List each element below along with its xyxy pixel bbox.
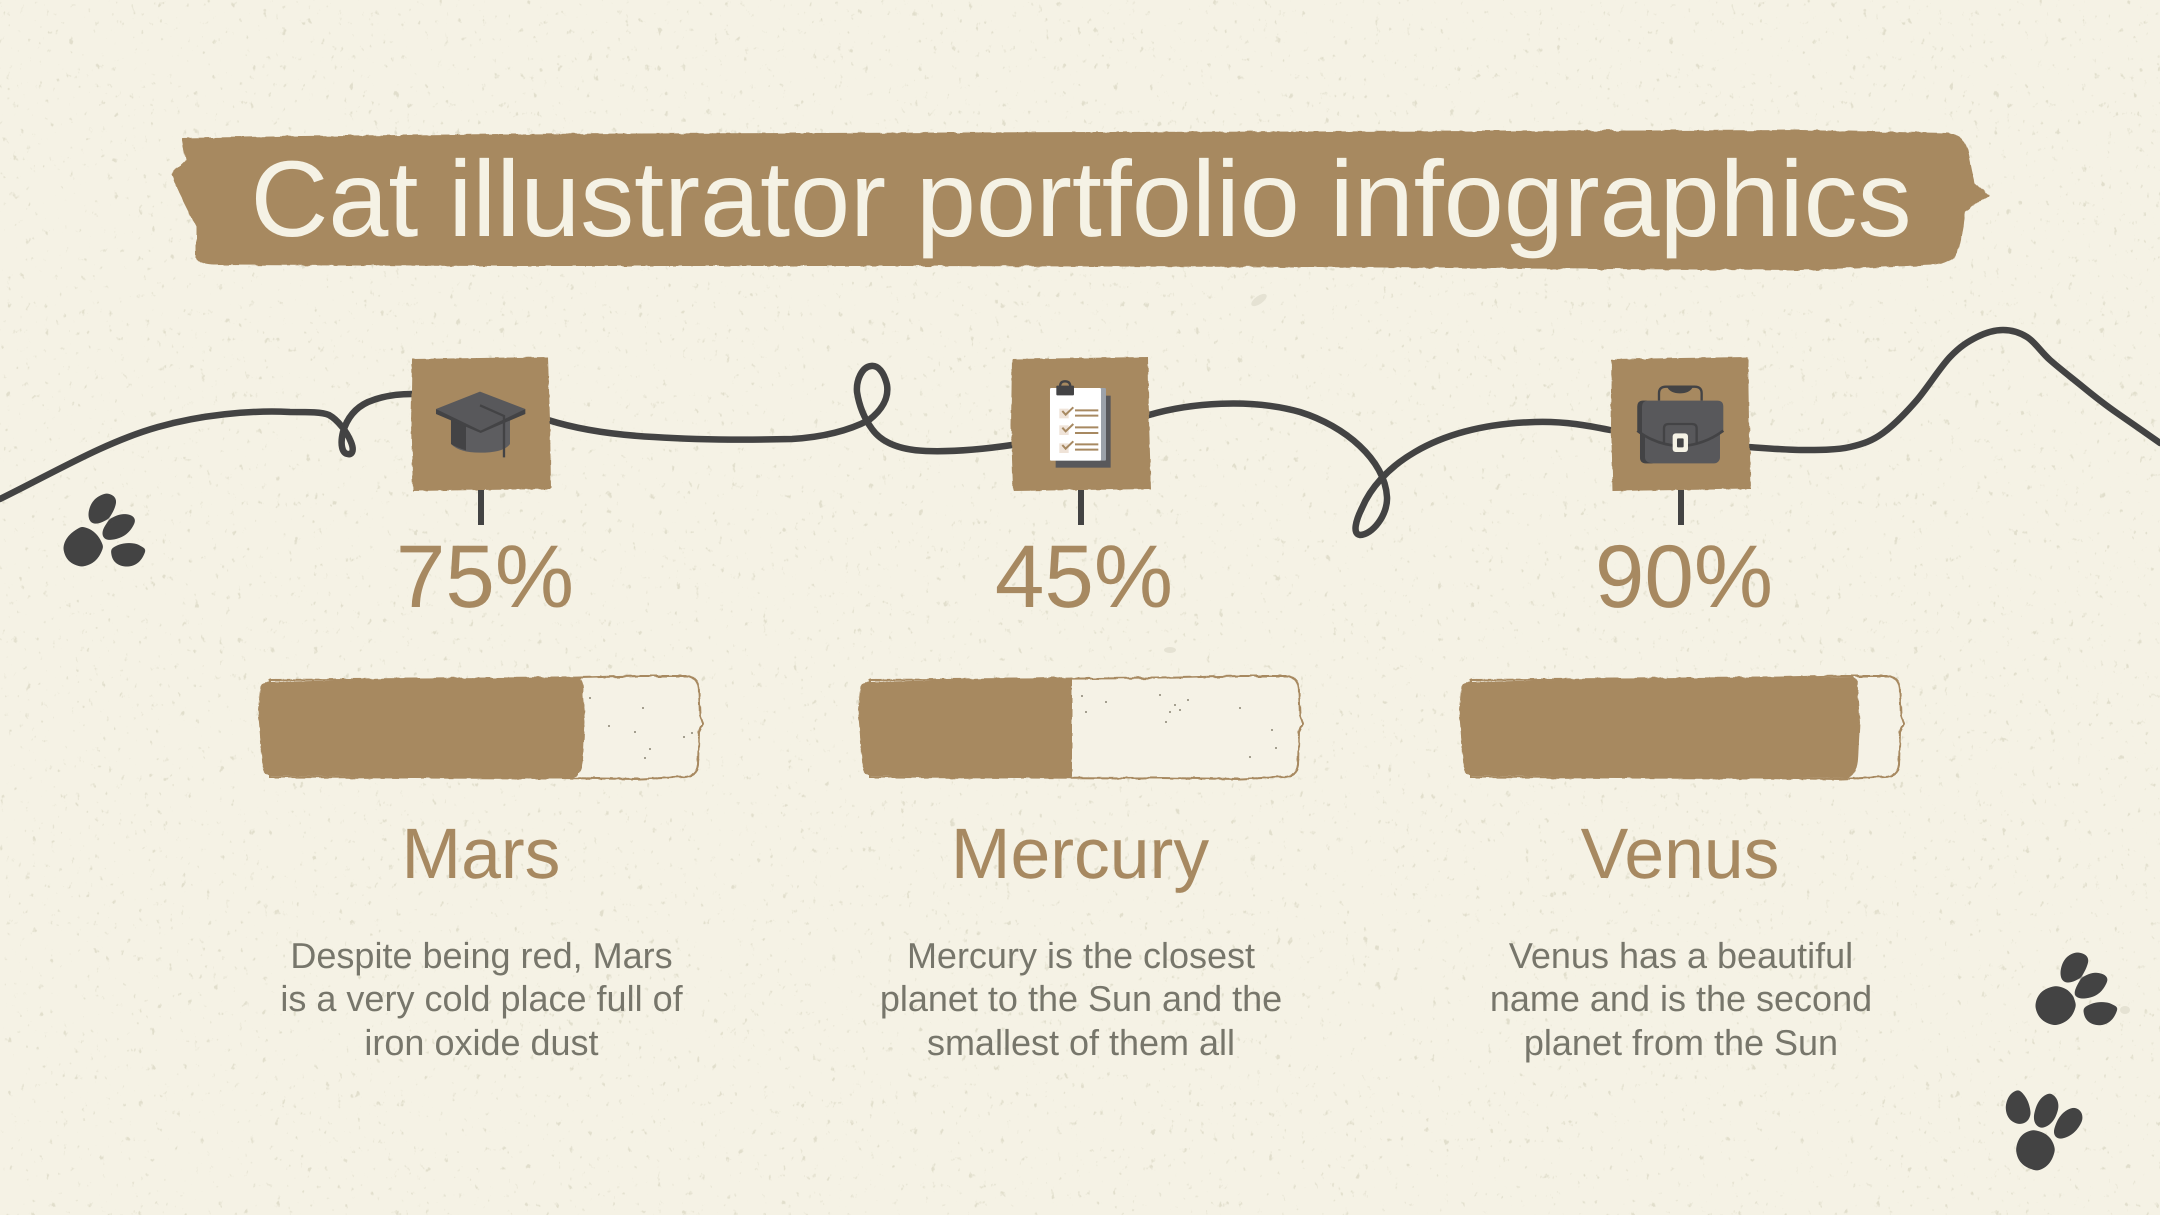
description: Mars: is a very cold place full of xyxy=(280,978,684,1019)
label: Mercury: Mercury xyxy=(951,814,1209,894)
icon: briefcase xyxy=(1637,387,1723,463)
icon: graduation cap xyxy=(436,392,525,457)
description: Mercury: smallest of them all xyxy=(927,1022,1235,1063)
description: Mercury: Mercury is the closest xyxy=(907,935,1255,976)
connector stem: Mars xyxy=(478,490,484,525)
title text: Cat illustrator portfolio infographics xyxy=(250,138,1912,259)
connector stem: Venus xyxy=(1678,490,1684,525)
progress bar: Venus 90% xyxy=(1459,676,1904,779)
description: Venus xyxy=(1490,935,1872,1063)
title banner xyxy=(172,130,1989,270)
icon panel: graduation cap xyxy=(411,357,551,491)
icon: paw print right upper xyxy=(2036,954,2116,1024)
description: Venus: name and is the second xyxy=(1490,978,1872,1019)
icon: paw print left xyxy=(64,495,144,566)
progress bar: Mars 75% xyxy=(258,676,703,779)
label: Mars: Mars xyxy=(402,814,560,894)
description: Mars: iron oxide dust xyxy=(364,1022,599,1063)
description: Mars: Despite being red, Mars xyxy=(290,935,673,976)
winding line connecting the icons xyxy=(0,330,2160,535)
label: Venus: Venus xyxy=(1581,814,1779,894)
progress bar: Mercury 45% xyxy=(858,676,1303,779)
description: Venus: planet from the Sun xyxy=(1524,1022,1838,1063)
description: Venus: Venus has a beautiful xyxy=(1509,935,1853,976)
icon panel: briefcase xyxy=(1611,357,1751,491)
description: Mercury: planet to the Sun and the xyxy=(880,978,1282,1019)
description: Mercury xyxy=(880,935,1282,1063)
percentage: 45%: 45% xyxy=(995,526,1173,626)
icon: paw print right lower xyxy=(2008,1092,2081,1170)
connector stem: Mercury xyxy=(1078,490,1084,525)
description: Mars xyxy=(280,935,684,1063)
percentage: 90%: 90% xyxy=(1595,526,1773,626)
icon: clipboard checklist xyxy=(1050,381,1111,468)
icon panel: clipboard xyxy=(1011,357,1151,491)
percentage: 75%: 75% xyxy=(396,526,574,626)
